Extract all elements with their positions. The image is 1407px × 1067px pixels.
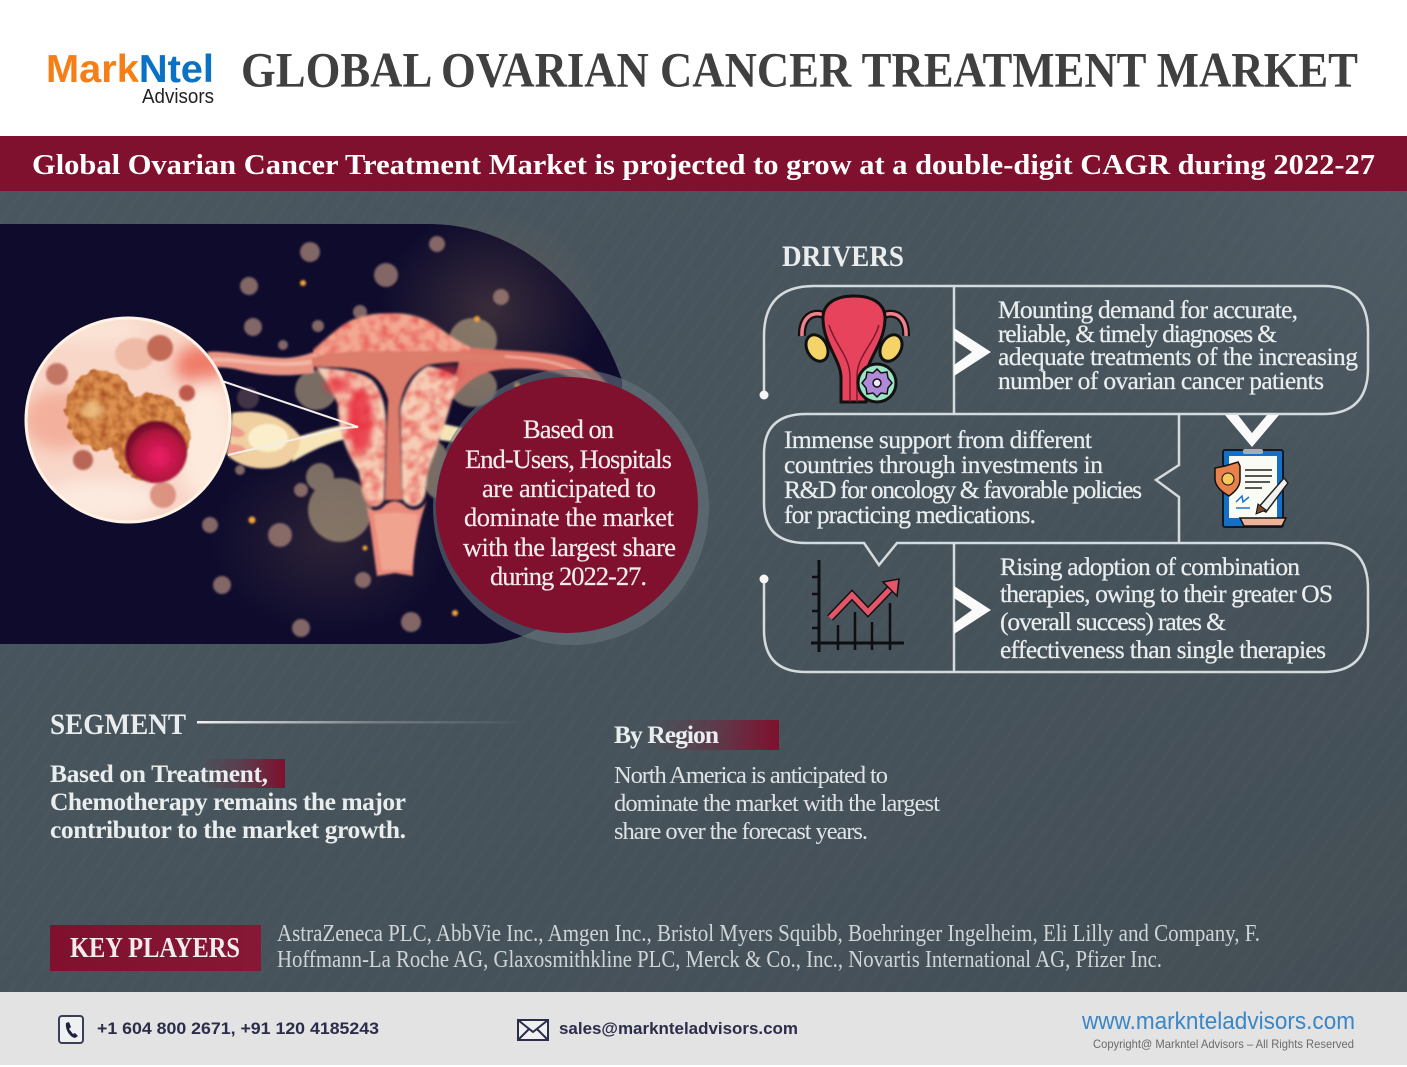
segment: treatment text: contributor to the market growth. bbox=[50, 815, 406, 844]
drivers frame bbox=[760, 286, 1368, 672]
uterus body bbox=[312, 313, 505, 576]
driver text 3: therapies, owing to their greater OS bbox=[1000, 579, 1333, 608]
driver text 1: reliable, & timely diagnoses & bbox=[998, 319, 1277, 348]
segment: by region text: By Region bbox=[614, 720, 719, 749]
key players list: Hoffmann-La Roche AG, Glaxosmithkline PLC, Merck & Co., Inc., Novartis International AG, Pfizer Inc. bbox=[277, 947, 1162, 973]
logo: MarkNtel Advisors: Advisors bbox=[142, 86, 214, 108]
driver text 3 bbox=[1000, 552, 1333, 664]
callout circle: end-users: are anticipated to bbox=[482, 473, 656, 503]
key players label: KEY PLAYERS bbox=[70, 933, 240, 964]
callout circle: end-users: Based on bbox=[523, 414, 614, 444]
segment: treatment text: Based on Treatment, bbox=[50, 759, 268, 788]
lens pointer lines bbox=[222, 381, 358, 455]
main dark slate background bbox=[0, 190, 1407, 992]
driver text 3: (overall success) rates & bbox=[1000, 607, 1226, 636]
driver text 2 bbox=[784, 425, 1142, 529]
key players list bbox=[277, 921, 1260, 973]
website: www.marknteladvisors.com bbox=[1081, 1008, 1355, 1035]
driver text 1: number of ovarian cancer patients bbox=[998, 366, 1324, 395]
icon: rising line chart bbox=[811, 560, 904, 652]
driver text 1: Mounting demand for accurate, bbox=[998, 295, 1298, 324]
right ligament bbox=[440, 423, 480, 446]
driver text 1: adequate treatments of the increasing bbox=[998, 342, 1358, 371]
callout circle: end-users: during 2022-27. bbox=[490, 561, 647, 591]
left ligament and ovary bbox=[226, 412, 358, 468]
email address: sales@marknteladvisors.com bbox=[559, 1019, 798, 1038]
callout circle: end-users: End-Users, Hospitals bbox=[465, 444, 672, 474]
key players list: AstraZeneca PLC, AbbVie Inc., Amgen Inc., Bristol Myers Squibb, Boehringer Ingelheim, Eli Lilly and Company, F. bbox=[277, 921, 1260, 947]
icon: uterus with cancer cell bbox=[802, 296, 906, 402]
panel: uterus illustration on dark background bbox=[0, 210, 709, 645]
driver text 3: Rising adoption of combination bbox=[1000, 552, 1300, 581]
phone numbers: +1 604 800 2671, +91 120 4185243 bbox=[97, 1019, 379, 1038]
segment: treatment text: Chemotherapy remains the major bbox=[50, 787, 406, 816]
key players label bbox=[50, 925, 261, 971]
callout circle: end-users: dominate the market bbox=[464, 502, 675, 532]
driver text 3: effectiveness than single therapies bbox=[1000, 635, 1326, 664]
driver text 2: countries through investments in bbox=[784, 450, 1103, 479]
icon: envelope bbox=[518, 1020, 548, 1040]
heading: segment: SEGMENT bbox=[50, 708, 186, 741]
segment: treatment text bbox=[50, 759, 406, 844]
white chevrons bbox=[954, 328, 1279, 634]
magnified tumour lens bbox=[22, 316, 233, 522]
driver text 2: Immense support from different bbox=[784, 425, 1092, 454]
icon: phone bbox=[59, 1016, 83, 1043]
driver text 2: for practicing medications. bbox=[784, 500, 1036, 529]
driver text 1 bbox=[998, 295, 1358, 395]
callout circle: end-users bbox=[433, 369, 709, 645]
subtitle banner: Global Ovarian Cancer Treatment Market is projected to grow at a double-digit CAGR during 2022-27 bbox=[32, 149, 1375, 181]
segment: by region text: dominate the market with the largest bbox=[614, 790, 940, 817]
footer bbox=[0, 992, 1407, 1065]
copyright: Copyright@ Markntel Advisors – All Rights Reserved bbox=[1093, 1037, 1354, 1051]
icon: clipboard with shield and pen bbox=[1215, 449, 1288, 527]
callout circle: end-users: with the largest share bbox=[463, 532, 676, 562]
segment: by region text: North America is anticipated to bbox=[614, 762, 888, 789]
segment: by region text: share over the forecast years. bbox=[614, 818, 868, 845]
logo: MarkNtel Advisors: MarkNtel bbox=[46, 48, 214, 91]
uterus drawing bbox=[207, 313, 608, 576]
subtitle banner bbox=[0, 136, 1407, 191]
fallopian tubes bbox=[207, 346, 608, 400]
driver text 2: R&D for oncology & favorable policies bbox=[784, 475, 1142, 504]
heading: drivers: DRIVERS bbox=[782, 240, 904, 273]
segment: by region text bbox=[614, 720, 940, 845]
